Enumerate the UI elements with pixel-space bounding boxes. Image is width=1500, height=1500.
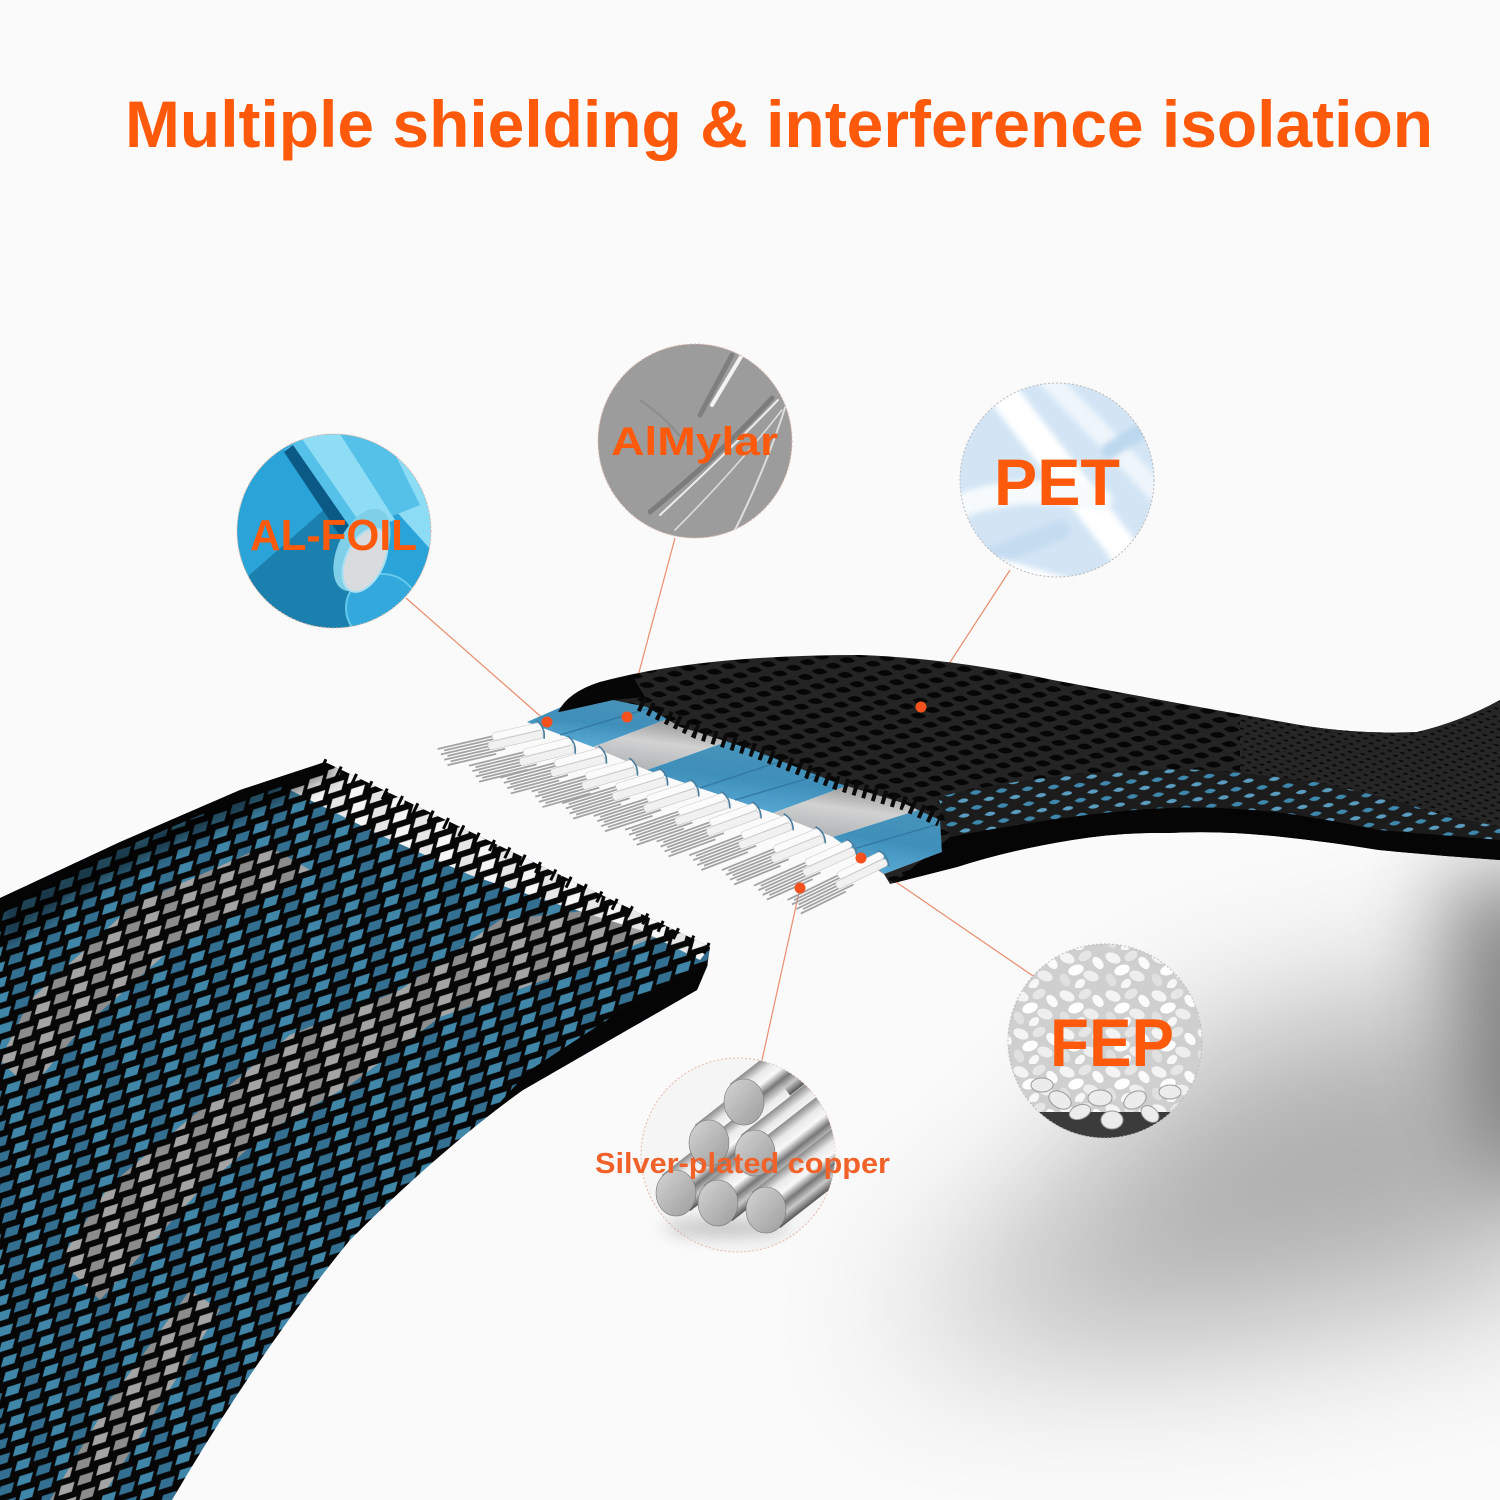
callout: FEP [1005,940,1205,1147]
solid black lower edge [490,964,708,1113]
callout: AL-FOIL [236,434,432,628]
background shadow [880,870,1500,1340]
blue foil peeking through lower mesh [938,769,1500,840]
marker dots [542,702,926,894]
braided sleeve: right piece [558,655,1500,884]
open mesh at the cut end [290,762,710,960]
solid black lower strip [890,808,1500,886]
connector lines [406,538,1036,1060]
braided sleeve: left piece [0,750,720,1500]
callout: AlMylar [598,344,792,538]
cut edge teeth [322,764,710,950]
title: Multiple shielding & interference isolation [125,87,1433,161]
finer weave toward the right [1240,700,1500,840]
jagged cut edge of the braid [640,704,940,820]
grey foil bands seen through the mesh [0,845,660,1500]
label: AlMylar [611,420,778,464]
label: PET [994,445,1120,519]
exposed foil layers [527,690,1000,874]
exposed insulated wires [436,720,892,916]
label: AL-FOIL [250,511,417,560]
callout: Silver-plated copper [596,1058,890,1252]
label: Silver-plated copper [595,1148,890,1180]
label: FEP [1050,1005,1174,1081]
dark strip along upper edge [0,762,340,950]
callout: PET [960,382,1154,578]
